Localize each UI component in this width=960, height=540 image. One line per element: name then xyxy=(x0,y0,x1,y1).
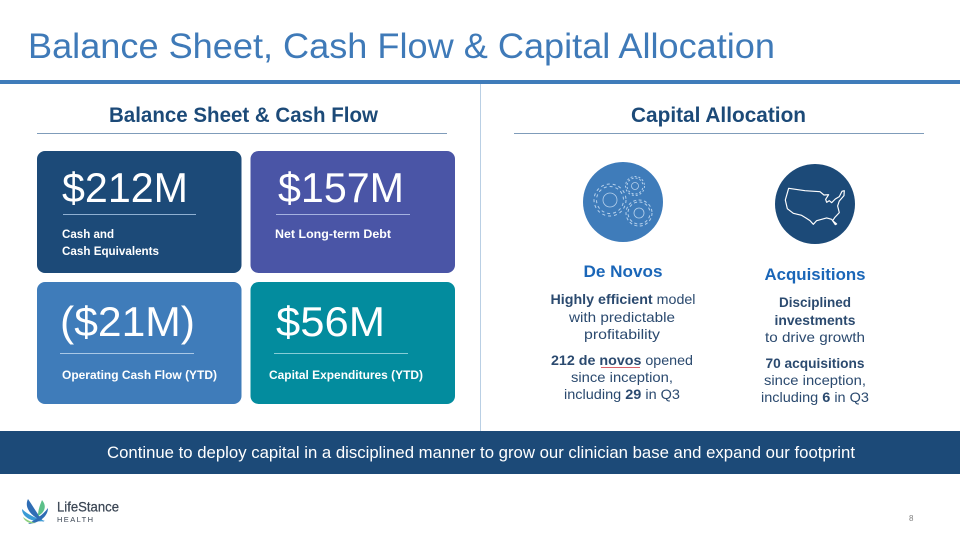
panel: net long-term debt: $157M xyxy=(278,164,404,211)
text block: acquisitions: including 6 in Q3 xyxy=(761,389,869,405)
panel: cash and cash equivalents: $212M xyxy=(62,164,188,211)
text block: de novos: since inception, xyxy=(571,369,673,385)
text block: acquisitions: investments xyxy=(774,312,856,328)
panel: cash and cash equivalents: Cash and xyxy=(62,227,114,241)
panel: operating cash flow: ($21M) xyxy=(60,298,195,345)
text block: acquisitions: Acquisitions xyxy=(764,265,866,284)
text block: de novos: De Novos xyxy=(584,262,662,281)
text block: de novos: Highly efficient model xyxy=(550,291,696,307)
text block: acquisitions: 70 acquisitions xyxy=(766,355,865,371)
text block: acquisitions xyxy=(761,265,869,405)
text block: de novos: profitability xyxy=(584,326,660,342)
panel: net long-term debt xyxy=(250,151,455,273)
panel: operating cash flow xyxy=(37,282,242,404)
text block: acquisitions: since inception, xyxy=(764,372,866,388)
text block: de novos xyxy=(550,262,696,402)
text block: de novos: including 29 in Q3 xyxy=(564,386,680,402)
banner xyxy=(0,431,960,474)
panel: capital expenditures: $56M xyxy=(276,298,385,345)
heading: capital allocation: Capital Allocation xyxy=(631,104,806,127)
logo: LifeStance Health: LifeStance xyxy=(57,498,119,514)
panel: cash and cash equivalents xyxy=(37,151,242,273)
icon: gears xyxy=(583,162,663,242)
text block: de novos: with predictable xyxy=(568,309,675,325)
logo: LifeStance Health xyxy=(22,498,119,524)
panel: operating cash flow: Operating Cash Flow (YTD) xyxy=(62,368,217,382)
panel: cash and cash equivalents: Cash Equivalents xyxy=(62,244,159,258)
text block: acquisitions: to drive growth xyxy=(765,329,865,345)
icon: US map xyxy=(775,164,855,244)
logo: LifeStance Health: HEALTH xyxy=(57,515,93,524)
title: Balance Sheet, Cash Flow & Capital Allocation xyxy=(28,27,775,66)
page number: 8 xyxy=(909,514,914,523)
panel: capital expenditures xyxy=(250,282,455,404)
text block: de novos: 212 de novos opened xyxy=(551,352,693,368)
banner: Continue to deploy capital in a disciplined manner to grow our clinician base and expand our footprint xyxy=(107,444,855,462)
heading: balance sheet and cash flow: Balance Sheet & Cash Flow xyxy=(109,104,379,127)
panel: net long-term debt: Net Long-term Debt xyxy=(275,227,391,241)
panel: capital expenditures: Capital Expenditures (YTD) xyxy=(269,368,423,382)
text block: acquisitions: Disciplined xyxy=(779,294,851,310)
